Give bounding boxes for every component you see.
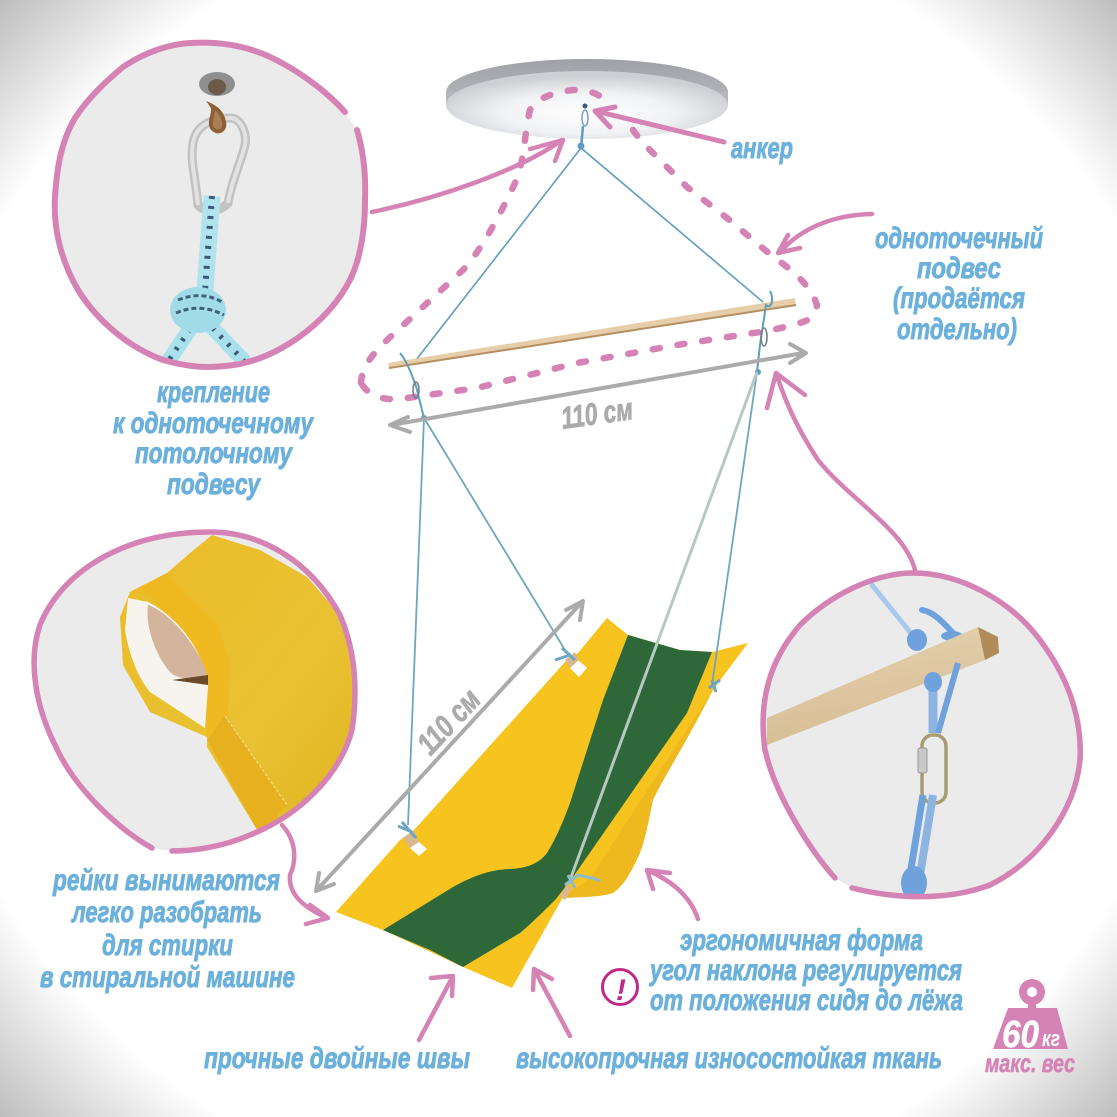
caption: ergonomic shape: от положения сидя до лёжа [650,984,963,1017]
photo: brass link [211,106,224,131]
photo: upper blue ropes [872,585,963,651]
caption: mount: к одноточечному [113,407,314,440]
caption: single-point suspension: одноточечный [875,222,1043,255]
arrow to fabric [533,969,570,1036]
photo: pocket fold [130,573,230,740]
caption: removable rods: в стиральной машине [40,961,295,994]
caption: removable rods: рейки вынимаются [52,864,280,897]
side ropes and links [400,291,772,421]
caption: mount: подвесу [167,468,261,501]
icon: exclamation mark: ! [616,974,626,1007]
detail circle: bar and quick link [755,565,1090,905]
photo: ropes and quick link [901,663,958,900]
icon: 60 kg weight: макс. вес [985,1048,1075,1078]
caption: durable fabric: высокопрочная износостойкая ткань [516,1042,942,1075]
grey dimension arrow: seat length: 110 см [410,682,487,761]
arrow to seat shape [647,870,698,919]
icon: 60 kg weight: кг [1042,1026,1060,1051]
lower suspension ropes [398,372,757,888]
caption: anchor: анкер [731,132,793,165]
green stripe [383,635,712,967]
arrow to single-point suspension [778,214,872,253]
photo: yellow fabric [120,535,362,838]
pink dashed outline: single-point suspension [361,90,817,399]
icon: exclamation mark [602,970,638,1007]
caption: single-point suspension: (продаётся [893,282,1025,315]
caption: single-point suspension [875,222,1043,346]
photo: stitched band [207,716,287,835]
photo: wooden bar [767,627,999,745]
wooden spreader bar [388,298,796,369]
caption: removable rods: легко разобрать [71,896,262,929]
arrow to double seams [419,976,453,1040]
caption: mount: крепление [157,376,270,409]
caption: removable rods [40,864,295,994]
caption: ergonomic shape: угол наклона регулируется [649,954,962,987]
icon: 60 kg weight: 60 [1002,1014,1039,1056]
caption: ergonomic shape: эргономичная форма [680,924,923,957]
rods in notches [403,830,419,848]
caption: mount: потолочному [135,437,293,470]
caption: single-point suspension: отдельно) [897,313,1017,346]
grey dimension arrow: bar length: 110 см [559,391,635,436]
notch openings [410,841,427,856]
caption: single-point suspension: подвес [917,252,1001,285]
caption: mount [113,376,314,501]
grey dimension arrow: seat length [316,601,583,891]
photo: towel lining [125,598,208,728]
arrow from pocket detail to seat [282,825,328,924]
suspension ropes, upper triangle [416,104,763,360]
photo: blue rope and knot [165,196,245,366]
arrow from bar detail to bar [767,373,915,570]
connector arrow to ceiling mount [372,140,563,212]
grey dimension arrow: bar length [390,344,806,436]
photo: anchor washer [199,72,235,96]
caption: ergonomic shape [649,924,963,1017]
hammock fabric [336,618,748,988]
ceiling disc [446,59,728,139]
photo: steel carabiner [192,118,245,210]
icon: 60 kg weight [985,983,1075,1078]
yellow seat [336,618,748,988]
anchor arrow [595,107,724,142]
caption: removable rods: для стирки [102,929,233,962]
underside of seat [565,690,713,898]
detail circle: carabiner and rope [52,40,368,370]
detail circle: fabric pocket [31,529,358,854]
photo: wooden rod end [147,605,207,679]
caption: double seams: прочные двойные швы [204,1042,470,1075]
